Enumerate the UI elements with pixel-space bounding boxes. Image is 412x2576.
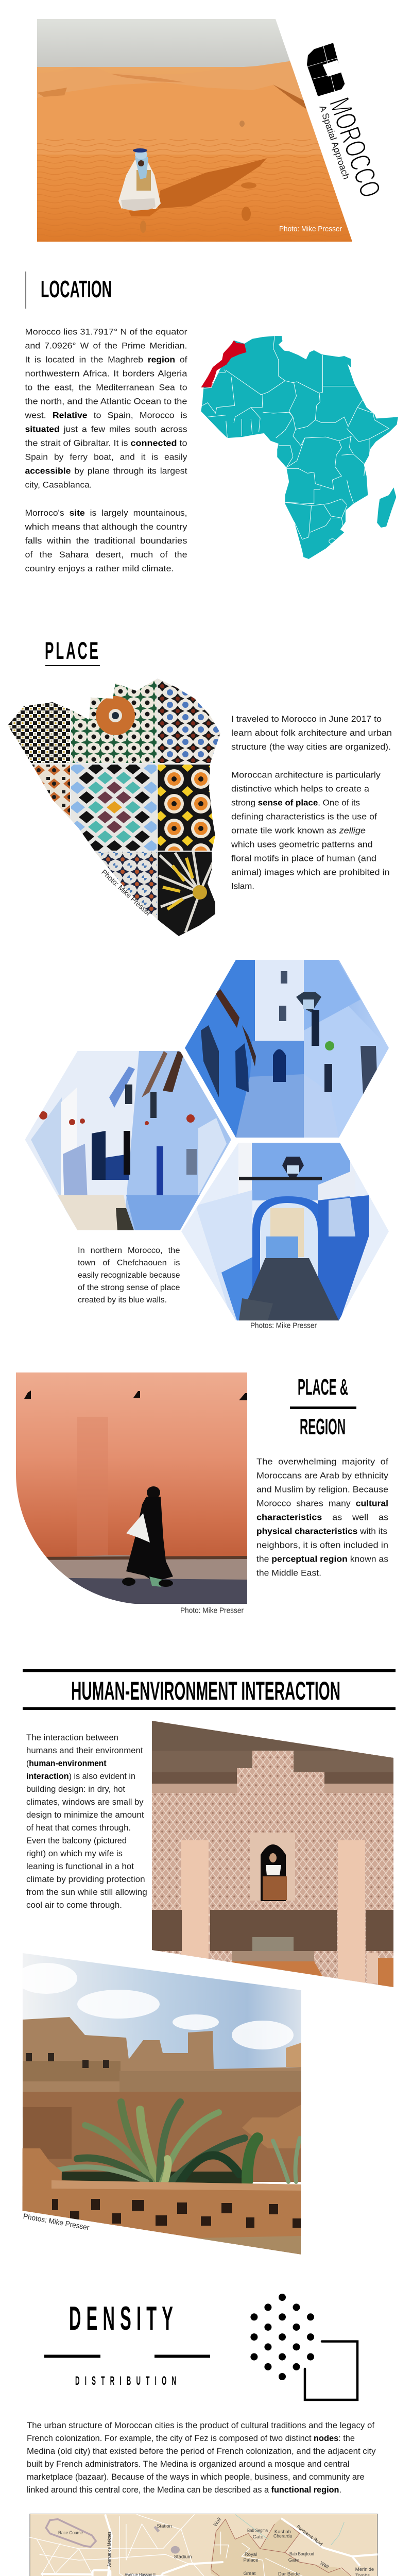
text: building design: building design: in dry, hot — [26, 1785, 125, 1794]
text: location paragraphs: Morocco lies 31.7917° N of the equator — [25, 327, 187, 337]
wall lantern — [296, 992, 321, 1012]
text: location paragraphs: It is located in the Maghreb region of — [25, 354, 187, 365]
caption: wall photo: Photo: Mike Presser — [180, 1606, 244, 1615]
text: Chefchaouen: In northern Morocco, the — [78, 1246, 180, 1255]
icon: square bracket outline — [305, 2342, 357, 2400]
text: building design: humans and their environment — [26, 1746, 143, 1755]
map labels: Cherarda — [273, 2534, 293, 2539]
text: location paragraphs: of the Sahara desert, much of the — [25, 550, 187, 560]
title: MOROCCO: MOROCCO — [323, 93, 387, 201]
text: location paragraphs: northwestern Africa. It borders Algeria — [25, 369, 187, 378]
caption rotated below kasbah: Photos: Mike Presser — [23, 2212, 90, 2232]
text: Chefchaouen: easily recognizable because — [78, 1271, 180, 1280]
text: place paragraphs: floral motifs in place of human (and — [231, 853, 376, 863]
diamond tile grid — [70, 762, 159, 853]
heading: density and distribution — [44, 2299, 210, 2387]
text: urban structure: built by French administrators. The Medina is organized around a mosque and central — [27, 2460, 349, 2469]
text: building design: (human-environment — [26, 1759, 107, 1768]
text: place paragraphs: strong sense of place. One of its — [231, 798, 360, 808]
text: building design: interaction) is also evident in — [26, 1772, 135, 1781]
text: place and region: characteristics as well as — [256, 1513, 388, 1522]
text: Chefchaouen: of the strong sense of place — [78, 1283, 180, 1292]
text: urban structure — [27, 2421, 376, 2495]
heading: human-environment interaction — [23, 1669, 396, 1710]
heading: PLACE & REGION: PLACE & — [298, 1375, 348, 1400]
map labels: Race Course — [58, 2530, 83, 2536]
photo: kasbah with palm trees — [15, 1953, 304, 2255]
text: location paragraphs: the north, and the Atlantic Ocean to the — [25, 397, 187, 406]
text: location paragraphs: Morroco's site is largely mountainous, — [25, 508, 187, 518]
map shapes and roads — [30, 2514, 377, 2576]
minor streets — [30, 2514, 377, 2576]
map: Africa with Morocco highlighted — [201, 336, 398, 559]
text: place paragraphs — [231, 714, 392, 891]
race course, stadium, hospital, station — [46, 2519, 96, 2547]
heading: PLACE: PLACE — [45, 637, 98, 665]
tile grout lines — [31, 679, 212, 920]
subtitle: A Spatial Approach: A Spatial Approach — [317, 104, 352, 181]
text: building design: climates, windows are small by — [26, 1798, 144, 1807]
text: location paragraphs: Spain by ferry boat, and it is easily — [25, 452, 187, 462]
text: location paragraphs: accessible by plane through its largest — [25, 466, 187, 476]
map labels: Gate — [253, 2534, 263, 2540]
map labels: Merinide — [355, 2567, 374, 2572]
date palm — [52, 2102, 300, 2184]
photo: woman walking by terracotta wall — [16, 1372, 247, 1604]
text: building design: of heat that comes through. — [26, 1823, 131, 1833]
map labels — [30, 2517, 376, 2576]
text: place paragraphs: Islam. — [231, 881, 254, 891]
text: place paragraphs: learn about folk architecture and urban — [231, 728, 392, 738]
map labels: Kasbah — [274, 2529, 291, 2535]
text: Chefchaouen: created by its blue walls. — [78, 1296, 167, 1304]
logo mark: tiled D shape — [307, 43, 345, 96]
balcony window with figure — [250, 1833, 295, 1901]
man's shadow — [158, 158, 267, 209]
sunburst tile — [96, 696, 135, 735]
text: place and region: the perceptual region known as — [256, 1554, 388, 1564]
text: place paragraphs: which uses geometric patterns and — [231, 840, 373, 849]
text: place and region: the Middle East. — [256, 1568, 321, 1578]
lantern — [282, 1157, 304, 1177]
text: building design: from the sun while still allowing — [26, 1888, 147, 1897]
text: location paragraphs: and 7.0926° W of the Prime Meridian. — [25, 341, 187, 350]
text: urban structure: The urban structure of Moroccan cities is the product of cultural traditions and the legacy of — [27, 2421, 374, 2430]
text: location paragraphs: country enjoys a rather mild climate. — [25, 564, 174, 573]
text: building design: right) on which my wife is — [26, 1849, 123, 1858]
text: place and region: neighbors, it is often included in — [256, 1540, 388, 1550]
main roads — [30, 2514, 377, 2576]
heading: density and distribution: DENSITY — [69, 2299, 173, 2337]
text: location paragraphs: which means that although the country — [24, 522, 187, 532]
text: urban structure: Medina (old city) that existed before the period of French colonization, and the adjacent city — [27, 2447, 376, 2456]
map labels: Panoramic Road — [296, 2524, 323, 2547]
text: location paragraphs: to the east, the Mediterranean Sea to — [25, 382, 187, 393]
text: location paragraphs: situated just a few miles south across — [25, 425, 187, 434]
text: urban structure: French colonization. For example, the city of Fez is composed of two distinct nodes: the — [27, 2434, 355, 2443]
text: urban structure: linked around this central core, the Medina can be described as a functional region. — [27, 2485, 341, 2495]
text: location paragraphs: west. Relative to Spain, Morocco is — [24, 410, 187, 420]
photo credit: Photo: Mike Presser — [279, 225, 342, 233]
caption rotated along mosaic: Photo: Mike Presser — [99, 868, 152, 918]
text: place paragraphs: ornate tile work known as zellige — [231, 825, 366, 836]
icon: dot cluster — [250, 2294, 314, 2380]
text: building design: leaning is functional in a hot — [26, 1862, 134, 1871]
map labels: Bab Segma — [247, 2528, 268, 2534]
text: building design: The interaction between — [26, 1733, 118, 1742]
hero photo: desert man — [37, 19, 356, 242]
photo hexagon: white and blue lane with pots — [23, 1048, 234, 1231]
photo hexagon: blue alley with stairs — [183, 958, 391, 1139]
text: location paragraphs — [24, 327, 187, 573]
Morocco highlighted — [201, 341, 247, 387]
map labels: Royal — [245, 2552, 257, 2557]
text: place paragraphs: defining characteristics is the use of — [231, 812, 377, 821]
map labels: Station — [157, 2523, 172, 2529]
heading: density and distribution: DISTRIBUTION — [75, 2374, 176, 2387]
text: place and region — [256, 1457, 389, 1578]
heading: LOCATION: LOCATION — [41, 276, 112, 302]
mud wall with openings — [22, 2148, 301, 2255]
text: building design — [26, 1733, 147, 1910]
rivers — [30, 2514, 344, 2576]
photo: carved riad balcony — [152, 1721, 394, 1990]
map labels: Wall — [319, 2561, 330, 2570]
text: place paragraphs: animal) images which are prohibited in — [231, 868, 390, 877]
text: location paragraphs: the strait of Gibraltar. It is connected to — [25, 438, 187, 448]
text: place paragraphs: distinctive which helps to create a — [231, 784, 370, 793]
map labels: Bab Boujloud — [289, 2551, 314, 2557]
text: location paragraphs: falls within the traditional boundaries — [25, 536, 187, 546]
text: place and region: Moroccans are Arab by ethnicity — [256, 1470, 389, 1481]
photo hexagon: blue archway — [180, 1141, 391, 1321]
map labels: Stadium — [174, 2554, 192, 2560]
text: building design: cool air to come through. — [26, 1901, 122, 1910]
map labels: Wall — [213, 2517, 222, 2528]
map labels: Avenue de Meknes — [107, 2532, 112, 2567]
seated man in white robe — [118, 148, 161, 212]
map labels: Palace — [243, 2557, 259, 2563]
map: city of Fez — [30, 2514, 377, 2576]
text: building design: Even the balcony (pictured — [26, 1836, 127, 1845]
text: Chefchaouen — [78, 1246, 180, 1304]
heading: PLACE & REGION: REGION — [300, 1414, 346, 1439]
text: place and region: physical characteristics with its — [256, 1526, 387, 1536]
text: place and region: Morocco shares many cultural — [256, 1498, 388, 1509]
hanging flower pots — [39, 1111, 195, 1125]
heading: PLACE & REGION — [290, 1375, 356, 1439]
text: building design: climate by providing protection — [26, 1875, 145, 1884]
text: Chefchaouen: town of Chefchaouen is — [78, 1259, 180, 1267]
mosaic: zellige tile sampler — [8, 679, 220, 936]
text: place paragraphs: structure (the way cities are organized). — [231, 742, 391, 752]
map labels: Gate — [288, 2557, 299, 2563]
walking figure — [122, 1486, 173, 1587]
text: place paragraphs: Moroccan architecture is particularly — [231, 770, 381, 780]
wall vents — [24, 1391, 247, 1400]
text: urban structure: marketplace (bazaar). Because of the ways in which people, business, and community are — [27, 2472, 365, 2482]
text: building design: design to minimize the amount — [26, 1810, 144, 1820]
radial black and yellow tile — [159, 851, 214, 933]
text: location paragraphs: city, Casablanca. — [25, 480, 92, 489]
caption: hexagon photos: Photos: Mike Presser — [250, 1322, 317, 1330]
text: place and region: and Muslim by religion. Because — [256, 1485, 388, 1494]
text: place paragraphs: I traveled to Morocco in June 2017 to — [231, 714, 382, 724]
text: place and region: The overwhelming majority of — [256, 1457, 388, 1466]
